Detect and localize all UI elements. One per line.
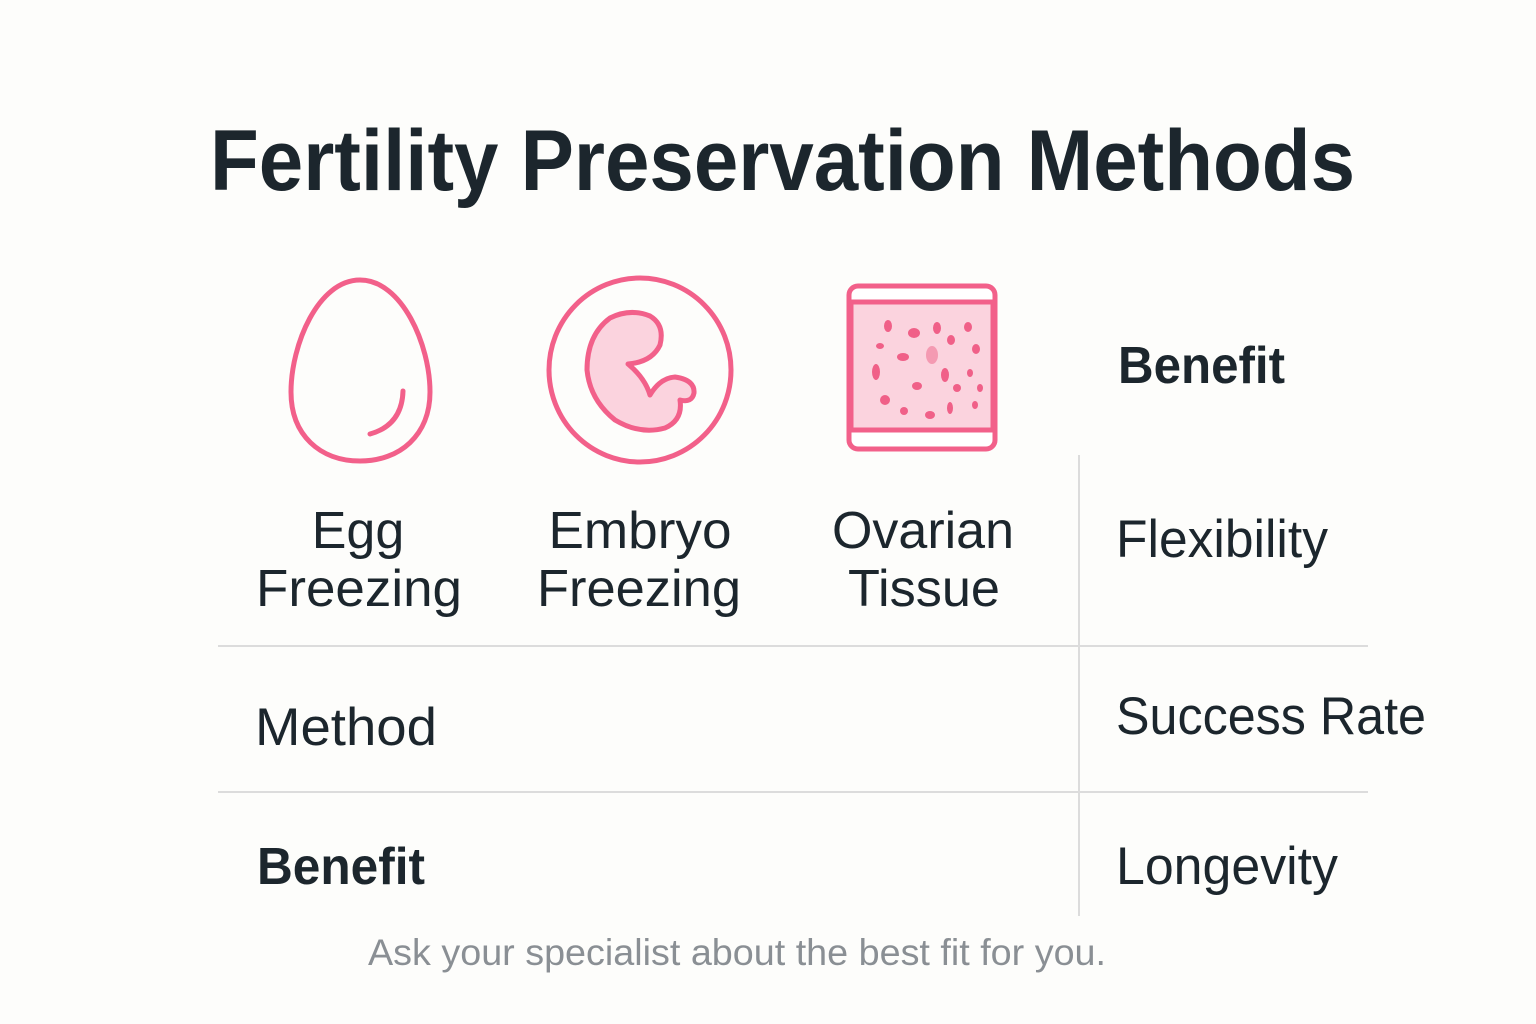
label: embryo freezing — [537, 502, 741, 618]
label: embryo freezing: Embryo — [548, 502, 732, 560]
label: embryo freezing: Freezing — [537, 560, 741, 618]
row label: method: Method — [255, 698, 437, 757]
heading: benefit (top): Benefit — [1118, 337, 1285, 395]
label: ovarian tissue: Ovarian — [832, 502, 1014, 560]
icon: embryo — [549, 278, 731, 462]
label: egg freezing: Egg — [312, 502, 404, 560]
label: egg freezing: Freezing — [256, 560, 462, 618]
footer note: Ask your specialist about the best fit for you. — [368, 932, 1106, 973]
icon: ovarian tissue — [849, 286, 995, 449]
label: ovarian tissue: Tissue — [848, 560, 1000, 618]
text: success rate: Success Rate — [1116, 687, 1426, 746]
icon: egg — [291, 280, 430, 461]
row label: benefit: Benefit — [257, 838, 425, 896]
text: flexibility: Flexibility — [1116, 510, 1328, 569]
label: ovarian tissue — [832, 502, 1014, 618]
title: Fertility Preservation Methods — [210, 113, 1355, 209]
label: egg freezing — [256, 502, 462, 618]
text: longevity: Longevity — [1116, 837, 1338, 896]
